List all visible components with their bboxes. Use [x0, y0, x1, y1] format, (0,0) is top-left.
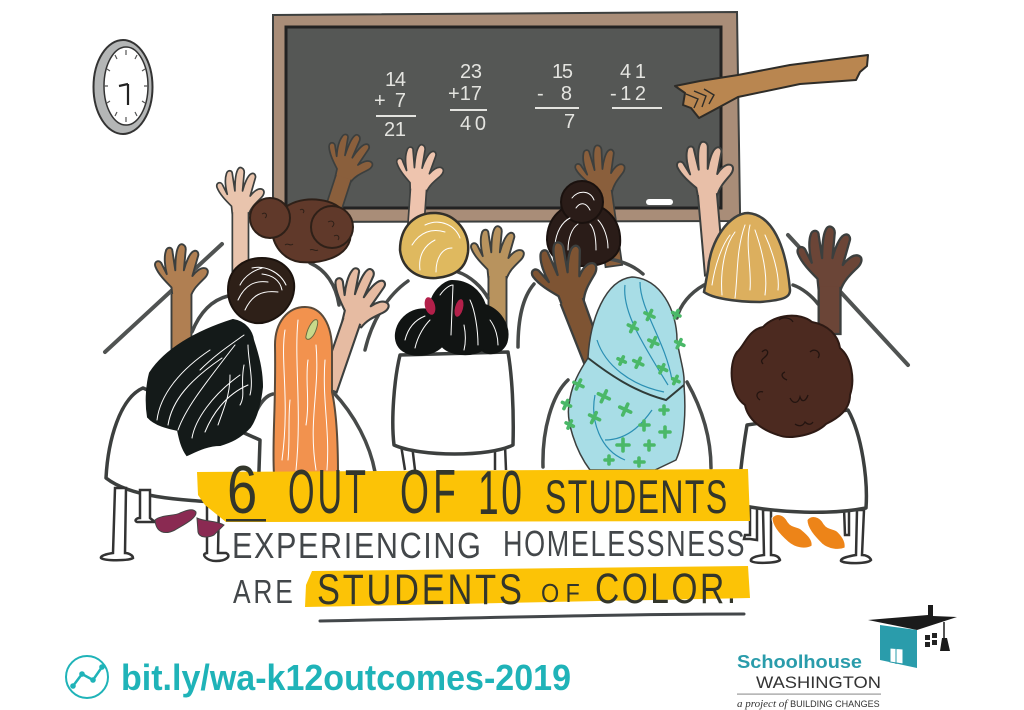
math problems on the board: 40 — [460, 113, 486, 135]
student: hair bun, body — [518, 258, 643, 347]
line 3: ARE — [233, 574, 296, 611]
teacher's pointing arm — [675, 55, 868, 118]
diagonal stroke left — [105, 244, 222, 352]
math problems on the board: 23 — [460, 61, 482, 83]
hair: black pigtails — [396, 281, 508, 355]
math problems on the board: 21 — [384, 119, 406, 141]
raised hand: tan, centre — [471, 226, 524, 326]
math problems on the board: +17 — [448, 83, 482, 105]
line 3: STUDENTS — [317, 566, 525, 614]
student: blonde short hair, body — [365, 272, 488, 350]
icon: trend line in circle — [66, 656, 108, 698]
line 1: OUT — [288, 457, 369, 527]
chalk — [646, 199, 673, 205]
hair: dark short — [228, 258, 294, 323]
yellow highlight band: top line — [197, 469, 750, 522]
hair: bun — [547, 181, 620, 266]
line 2: EXPERIENCING — [232, 527, 483, 567]
math problems on the board: 14 — [385, 69, 406, 91]
line 2 — [232, 523, 746, 567]
hair: orange long — [273, 307, 338, 475]
math problems on the board: - 8 — [537, 83, 572, 105]
student: brown buns, body — [310, 263, 339, 305]
hijab with clover pattern — [554, 277, 706, 470]
logo: school house icon — [868, 605, 957, 668]
raised hand: light, left — [217, 168, 264, 285]
math problems on the board: -12 — [610, 83, 646, 105]
logo: name: Schoolhouse — [737, 652, 862, 672]
headline underline — [320, 614, 744, 621]
raised hand: brown, in front of bun student — [526, 234, 624, 386]
line 1: 10 — [478, 458, 525, 527]
line 1: OF — [400, 457, 460, 526]
hair: black long — [147, 320, 262, 455]
line 3: OF — [541, 580, 586, 608]
line 3: COLOR. — [595, 565, 739, 613]
math problems on the board: 15 — [552, 61, 573, 83]
shoes: orange — [772, 515, 845, 549]
student: blonde long hair, body — [677, 285, 818, 318]
line 1: 6 — [227, 452, 257, 528]
hair clip — [306, 320, 318, 339]
raised hand: light, over orange hair student — [302, 260, 398, 399]
student: afro, body and legs — [739, 410, 871, 563]
student: orange hair, body — [257, 392, 375, 472]
logo: tagline: a project of BUILDING CHANGES — [737, 698, 880, 710]
line 1 — [226, 452, 729, 528]
student: black long hair, body — [106, 388, 260, 503]
math problems on the board: 41 — [620, 61, 646, 83]
student: pigtails, body and legs — [393, 352, 513, 470]
raised hand: dark brown, right — [798, 227, 861, 334]
raised hand: light, far right back — [675, 139, 742, 277]
hair: afro — [732, 316, 852, 437]
shoes: maroon — [155, 510, 224, 537]
link text: bit.ly/wa-k12outcomes-2019 — [121, 657, 571, 698]
student: black long hair, chair legs — [101, 488, 228, 561]
math problems on the board: 7 — [564, 111, 575, 133]
headline text — [226, 452, 746, 614]
raised hand: light, back centre — [392, 143, 445, 232]
raised hand: brown, back right — [573, 142, 638, 269]
yellow highlight band: bottom line — [305, 566, 750, 607]
raised hand: brown, back left — [311, 128, 380, 216]
logo: Schoolhouse Washington — [737, 605, 957, 710]
line 2: HOMELESSNESS — [503, 523, 746, 564]
student: hijab, body — [543, 380, 711, 468]
line 3 — [233, 565, 739, 614]
scrunchies — [423, 296, 437, 316]
hair: blonde long — [704, 213, 790, 302]
hair: blonde short — [400, 213, 468, 278]
student: dark short hair, body — [192, 296, 228, 332]
logo: Schoolhouse Washington: WASHINGTON — [756, 673, 881, 692]
diagonal stroke right — [788, 235, 908, 365]
line 1: STUDENTS — [545, 471, 729, 524]
icon: wall clock — [94, 40, 152, 134]
chalkboard — [273, 12, 740, 222]
math problems on the board — [374, 61, 662, 141]
math problems on the board: + 7 — [374, 90, 406, 112]
hair: brown buns — [250, 198, 353, 262]
raised hand: tan, far left — [155, 244, 208, 366]
